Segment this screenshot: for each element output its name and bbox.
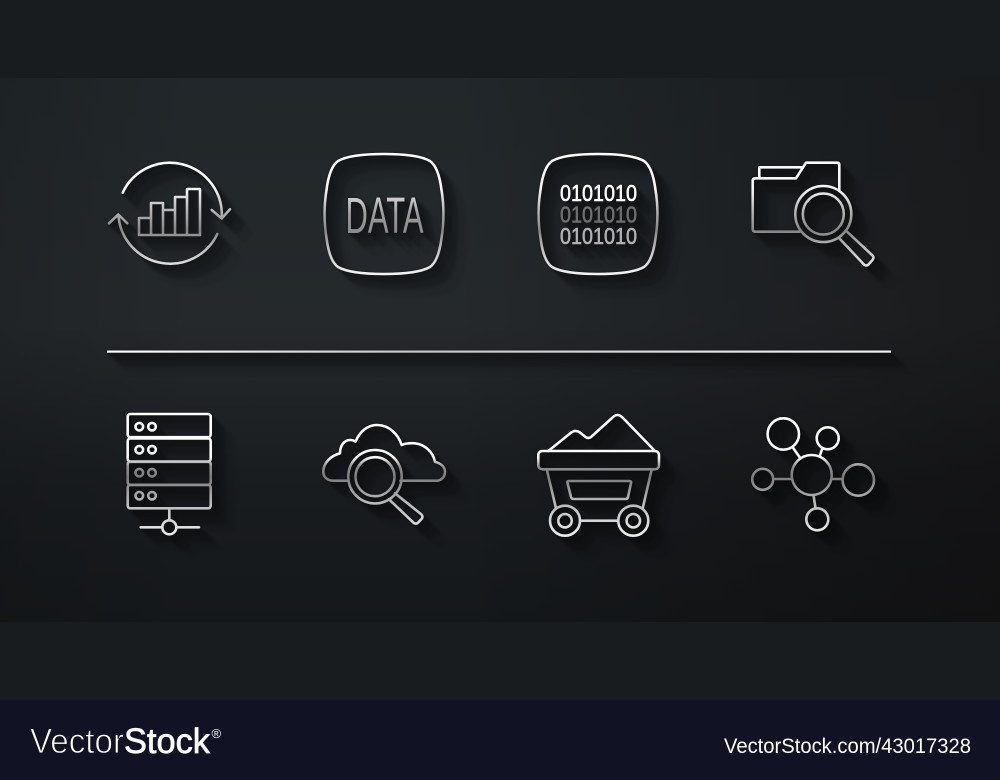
icon: binary code badge xyxy=(539,154,657,274)
icon: chart with refresh arrows xyxy=(109,163,230,264)
footer logo: VectorStock: Vector xyxy=(30,722,124,761)
binary rows: 0101010 xyxy=(560,202,637,228)
footer logo: VectorStock: ® xyxy=(212,726,222,741)
icon: server network xyxy=(128,414,211,534)
icon: folder search xyxy=(753,163,874,266)
footer logo: VectorStock xyxy=(30,722,222,761)
icon: data badge xyxy=(325,154,443,274)
footer image id: VectorStock.com/43017328 xyxy=(724,735,971,758)
binary rows: 0101010 xyxy=(560,180,637,206)
icon: cloud search xyxy=(323,425,445,524)
icon: mining cart xyxy=(538,415,659,536)
divider line xyxy=(107,350,891,353)
label: DATA: DATA xyxy=(346,187,424,244)
footer logo: VectorStock: Stock xyxy=(124,722,210,761)
footer bar xyxy=(0,700,1000,780)
icon: network nodes xyxy=(752,418,874,530)
binary rows: 0101010 xyxy=(560,223,637,249)
binary rows xyxy=(560,180,637,249)
